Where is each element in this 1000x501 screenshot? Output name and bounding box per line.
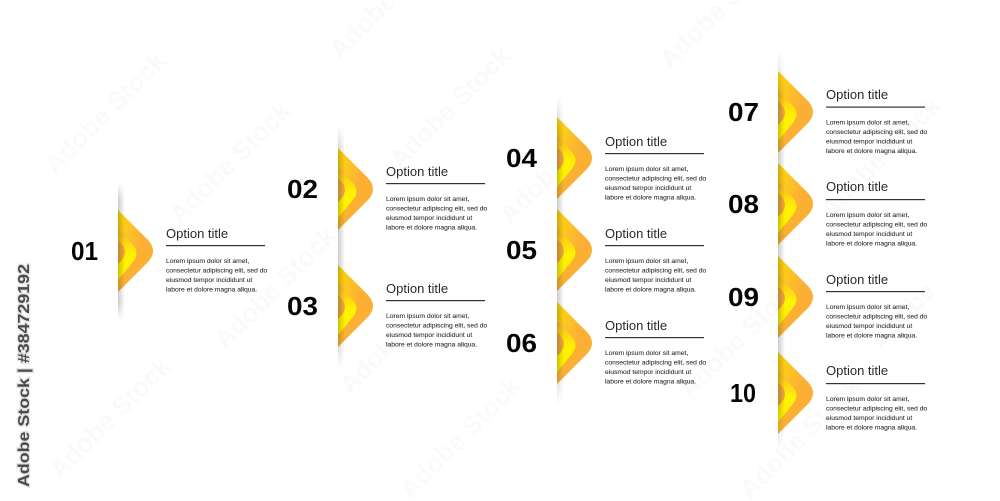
step 07 [728,71,928,155]
body 01: eiusmod tempor incididunt ut [166,277,252,284]
body 05: consectetur adipiscing elit, sed do [605,268,707,274]
fold shadow: column 4 [778,58,784,444]
watermark: Adobe Stock [208,220,342,354]
body 09: Lorem ipsum dolor sit amet, [826,304,909,311]
body 04: consectetur adipiscing elit, sed do [605,176,707,182]
body 01: labore et dolore magna aliqua. [166,286,257,294]
arrow 10 [778,352,813,434]
title 06: Option title [605,318,667,333]
body 05: eiusmod tempor incididunt ut [605,277,691,284]
title 09: Option title [826,272,888,287]
arrow 06 [557,302,592,384]
arrow 07 [778,71,813,153]
number 02: 02 [287,174,318,204]
watermark: Adobe Stock [383,40,517,174]
watermark: Adobe Stock [733,370,867,501]
fold shadow: column 2 [338,130,344,363]
body 07: labore et dolore magna aliqua. [826,148,917,155]
rule 04 [605,153,704,154]
watermark: Adobe Stock [38,45,172,179]
watermark: Adobe Stock [43,350,177,484]
step 04 [506,117,707,202]
number 10: 10 [730,378,756,408]
rule 01 [166,245,265,246]
number 03: 03 [287,291,318,321]
number 01: 01 [71,236,98,266]
body 06: Lorem ipsum dolor sit amet, [605,350,688,357]
title 08: Option title [826,179,888,194]
number 05: 05 [506,235,537,265]
rule 07 [826,106,925,108]
watermark: Adobe Stock [813,90,947,224]
body 08: eiusmod tempor incididunt ut [826,231,912,238]
body 03: labore et dolore magna aliqua. [386,342,477,348]
rule 09 [826,291,925,292]
arrow 03 [338,265,373,347]
body 02: consectetur adipiscing elit, sed do [386,206,488,212]
body 08: consectetur adipiscing elit, sed do [826,222,928,228]
body 06: labore et dolore magna aliqua. [605,378,696,386]
title 03: Option title [386,281,448,296]
body 04: Lorem ipsum dolor sit amet, [605,166,688,173]
body 09: consectetur adipiscing elit, sed do [826,314,928,320]
step 02 [287,148,488,232]
body 10: eiusmod tempor incididunt ut [826,415,912,422]
body 04: eiusmod tempor incididunt ut [605,185,691,192]
body 10: consectetur adipiscing elit, sed do [826,406,928,412]
fold shadow: column 3 [557,102,563,398]
body 04: labore et dolore magna aliqua. [605,194,696,202]
body 08: labore et dolore magna aliqua. [826,240,917,248]
stock credit: Adobe Stock | #384729192 [16,264,33,487]
body 02: labore et dolore magna aliqua. [386,224,477,232]
rule 02 [386,183,485,184]
arrow 08 [778,163,813,245]
step 01 [71,210,268,294]
title 05: Option title [605,226,667,241]
body 05: Lorem ipsum dolor sit amet, [605,258,688,265]
body 05: labore et dolore magna aliqua. [605,286,696,294]
fold shadow: column 1 [118,186,124,317]
rule 03 [386,300,485,301]
number 07: 07 [728,97,759,127]
body 02: Lorem ipsum dolor sit amet, [386,196,469,203]
watermark: Adobe [493,151,571,229]
body 06: eiusmod tempor incididunt ut [605,369,691,376]
step 08 [728,163,928,248]
body 01: consectetur adipiscing elit, sed do [166,268,268,274]
watermark: Adobe Stock [393,370,527,501]
title 01: Option title [166,226,228,241]
body 03: Lorem ipsum dolor sit amet, [386,313,469,320]
arrow 04 [557,117,592,199]
watermark: Adobe [333,321,411,399]
title 07: Option title [826,87,888,102]
body 09: eiusmod tempor incididunt ut [826,323,912,330]
body 01: Lorem ipsum dolor sit amet, [166,258,249,265]
step 09 [728,256,928,340]
body 03: consectetur adipiscing elit, sed do [386,322,488,330]
body 09: labore et dolore magna aliqua. [826,332,917,340]
arrow 05 [557,209,592,291]
number 08: 08 [728,189,759,219]
body 07: Lorem ipsum dolor sit amet, [826,120,909,126]
body 10: labore et dolore magna aliqua. [826,424,917,432]
rule 05 [605,245,704,246]
body 03: eiusmod tempor incididunt ut [386,332,472,339]
step 06 [506,302,707,386]
step 10 [730,352,928,434]
body 10: Lorem ipsum dolor sit amet, [826,396,909,403]
number 06: 06 [506,328,537,358]
watermark: Adobe Stock [673,270,807,404]
rule 08 [826,199,925,200]
body 07: eiusmod tempor incididunt ut [826,138,912,146]
title 02: Option title [386,164,448,179]
title 10: Option title [826,363,888,378]
arrow 09 [778,256,813,338]
rule 10 [826,383,925,384]
number 09: 09 [728,282,759,312]
body 06: consectetur adipiscing elit, sed do [605,360,707,366]
watermark: Adobe Stock [163,95,297,229]
title 04: Option title [605,134,667,149]
body 08: Lorem ipsum dolor sit amet, [826,212,909,219]
arrow 02 [338,148,373,230]
watermark: Adobe [863,276,941,354]
step 03 [287,265,488,348]
body 02: eiusmod tempor incididunt ut [386,215,472,222]
arrow 01 [118,210,153,292]
step 05 [506,209,707,294]
body 07: consectetur adipiscing elit, sed do [826,129,928,136]
number 04: 04 [506,143,538,173]
rule 06 [605,337,704,338]
